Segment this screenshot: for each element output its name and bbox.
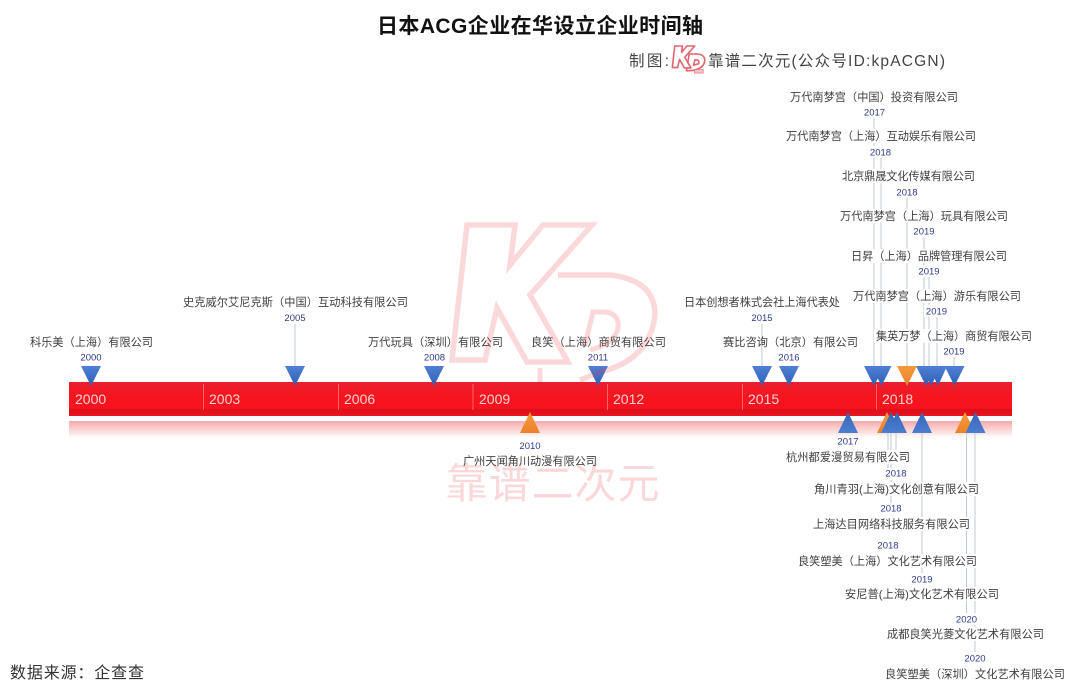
labels above the timeline [30,90,1034,364]
event: Nisshou Shanghai brand 2019 [849,249,1009,278]
axis year labels: 2003 [209,391,240,407]
event: Bandai Namco Shanghai entertainment 2018 [784,129,978,158]
title: 日本ACG企业在华设立企业时间轴 [377,14,703,38]
event: Bandai Namco China investment 2017: 万代南梦宫（中国）投资有限公司 [790,90,958,104]
watermark: KP logo and name [445,225,661,507]
connector lines [295,118,975,652]
event: Chengdu Good Smile 2020: 2020 [956,614,977,626]
event: Konami Shanghai 2000: 科乐美（上海）有限公司 [30,335,153,349]
event: Bandai Namco Shanghai amusement 2019: 2019 [926,306,947,318]
event: Shanghai Damu 2018: 上海达目网络科技服务有限公司 [813,517,970,531]
event: Good Smile Shenzhen 2020 [885,654,1065,681]
icon: KP logo [672,46,705,73]
event: Bandai Namco China investment 2017: 2017 [864,108,885,118]
event: Bandai Shenzhen 2008 [368,335,503,364]
event: Beijing Dingsheng 2018: 2018 [896,188,918,198]
watermark: KP logo and name: 靠谱二次元 [445,460,661,507]
event: Square Enix China 2005: 2005 [284,313,306,324]
event: Bandai Namco Shanghai amusement 2019: 万代南梦宫（上海）游乐有限公司 [853,289,1021,303]
event: Good Smile Shanghai art 2018: 良笑塑美（上海）文化艺术有限公司 [798,554,977,568]
event: Konami Shanghai 2000 [30,335,153,364]
axis year labels: 2015 [748,391,779,407]
event: Bandai Namco Shanghai toys 2019 [838,209,1010,238]
event: Anipu Shanghai 2019: 2019 [911,574,933,586]
credit line: 制图: [629,52,669,70]
source note: 数据来源：企查查 [10,664,144,682]
event: Good Smile Shanghai trading 2011 [531,335,666,364]
event: Nisshou Shanghai brand 2019: 日昇（上海）品牌管理有限公司 [851,249,1007,263]
event: Bandai Namco Shanghai toys 2019: 2019 [913,226,935,238]
event: Good Smile Shanghai trading 2011: 2011 [588,352,608,364]
event: Bandai Namco Shanghai amusement 2019 [851,289,1023,318]
event: Kadokawa Qingyu 2018 [812,468,981,496]
event: Kadokawa Qingyu 2018: 角川青羽(上海)文化创意有限公司 [814,482,979,496]
event: Saibi Beijing 2016: 赛比咨询（北京）有限公司 [723,335,858,349]
event: Japan Creators Shanghai office 2015: 日本创想者株式会社上海代表处 [684,295,840,309]
event: Good Smile Shanghai art 2018 [796,540,979,568]
timeline bar [69,382,1012,416]
event: Guangzhou Tianwen Kadokawa 2010: 广州天闻角川动漫有限公司 [463,454,597,468]
event: Beijing Dingsheng 2018: 北京鼎晟文化传媒有限公司 [842,169,975,183]
event: Konami Shanghai 2000: 2000 [80,352,102,364]
event: Good Smile Shanghai art 2018: 2018 [877,540,899,552]
event: Bandai Shenzhen 2008: 2008 [424,352,445,364]
event: Guangzhou Tianwen Kadokawa 2010 [463,441,597,468]
axis year labels: 2018 [882,391,913,407]
event: Shueisha-Man Shanghai trading 2019 [874,329,1034,358]
event: Bandai Namco Shanghai entertainment 2018: 万代南梦宫（上海）互动娱乐有限公司 [786,129,976,143]
event: Saibi Beijing 2016 [723,335,858,364]
credit line: 靠谱二次元(公众号ID:kpACGN) [708,52,945,70]
event: Hangzhou Duai 2017: 2017 [837,436,859,448]
event: Saibi Beijing 2016: 2016 [778,352,800,364]
event: Japan Creators Shanghai office 2015: 2015 [751,313,773,324]
event: Good Smile Shanghai trading 2011: 良笑（上海）商贸有限公司 [531,335,666,349]
event: Anipu Shanghai 2019: 安尼普(上海)文化艺术有限公司 [845,587,999,601]
event: Good Smile Shenzhen 2020: 良笑塑美（深圳）文化艺术有限公司 [885,667,1065,681]
event: Beijing Dingsheng 2018 [840,169,977,198]
event: Shanghai Damu 2018 [811,503,972,531]
event: Square Enix China 2005: 史克威尔艾尼克斯（中国）互动科技有限公司 [183,295,408,309]
axis year labels: 2009 [479,391,510,407]
event: Good Smile Shenzhen 2020: 2020 [964,654,986,664]
event: Chengdu Good Smile 2020 [885,613,1046,641]
event: Square Enix China 2005 [183,295,408,324]
event: Bandai Namco Shanghai toys 2019: 万代南梦宫（上海）玩具有限公司 [840,209,1008,223]
event: Shanghai Damu 2018: 2018 [880,504,902,514]
event: Guangzhou Tianwen Kadokawa 2010: 2010 [519,441,541,452]
event: Bandai Shenzhen 2008: 万代玩具（深圳）有限公司 [368,335,503,349]
event: Bandai Namco Shanghai entertainment 2018: 2018 [870,148,891,158]
event: Kadokawa Qingyu 2018: 2018 [885,468,907,480]
axis year labels: 2006 [344,391,375,407]
event: Japan Creators Shanghai office 2015 [684,295,840,324]
axis year labels [75,391,913,407]
event: Hangzhou Duai 2017 [784,436,912,464]
markers above the bar [81,366,964,386]
event: Shueisha-Man Shanghai trading 2019: 2019 [943,346,965,358]
axis year labels: 2012 [613,391,644,407]
event: Bandai Namco China investment 2017 [788,90,960,118]
labels below the timeline [463,436,1065,681]
event: Nisshou Shanghai brand 2019: 2019 [918,266,940,278]
event: Anipu Shanghai 2019 [843,573,1001,601]
axis year labels: 2000 [75,391,106,407]
credit line [629,46,945,73]
event: Shueisha-Man Shanghai trading 2019: 集英万梦（上海）商贸有限公司 [876,329,1032,343]
event: Chengdu Good Smile 2020: 成都良笑光菱文化艺术有限公司 [887,627,1044,641]
event: Hangzhou Duai 2017: 杭州都爱漫贸易有限公司 [786,450,910,464]
timeline bar reflection [69,421,1012,438]
markers below the bar [520,412,986,433]
